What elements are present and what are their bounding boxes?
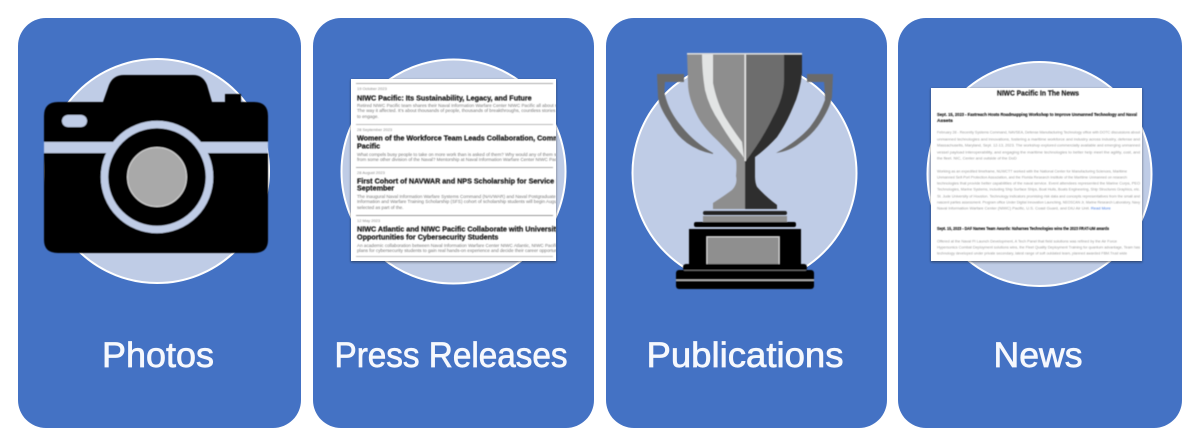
label: news: News: [994, 336, 1082, 375]
icon: trophy: [657, 53, 833, 289]
document: press releases list: 28 September 2023: [357, 127, 393, 132]
document: press releases list: 28 August 2023: [357, 170, 386, 175]
document: news page: Working as an expedited timeframe, NUWCTT worked with the National Center for Manufacturing Sciences, Maritime: [937, 168, 1128, 174]
label: photos: Photos: [102, 336, 214, 375]
document: press releases list: What compels busy people to take on more work than is asked of them? Why would any of them seek out more: [357, 152, 584, 157]
document: news page: February 28 - Recently Systems Command, NAVSEA, Defense Manufacturing Technology office with DOTC discussions about: [937, 130, 1141, 134]
document: press releases list: [349, 78, 558, 264]
document: press releases list: 12 May 2023: [357, 218, 381, 223]
document: news page: unmanned technologies and innovations, fostering a maritime workforce and industry across industry, defense and: [937, 136, 1140, 142]
document: press releases list: to engage.: [357, 114, 379, 119]
label: publications: Publications: [646, 336, 844, 375]
document: news page: Hypersonics Combat Deployment solutions wins, the Fleet Quality Deployment Training for quantum advantage, Team has: [937, 244, 1140, 250]
document: press releases list: An academic collaboration between Naval Information Warfare Center NIWC Atlantic, NIWC Pacific and the: [357, 243, 576, 248]
document: news page: Naval Information Warfare Center (NIWC) Pacific, U.S. Coast Guard, and DIU Air Unit. Read More: [937, 206, 1111, 210]
document: news page: the fleet. NIC, Center and outside of the DoD: [937, 156, 1017, 160]
document: press releases list: September: [357, 184, 394, 192]
document: news page: [931, 88, 1142, 261]
document: press releases list: NIWC Pacific: Its Sustainability, Legacy, and Future: [357, 94, 532, 102]
document: press releases list: The inaugural Naval Information Warfare Systems Command (NAVWAR) and Naval Postgraduate School: [357, 194, 571, 199]
document: press releases list: Women of the Workforce Team Leads Collaboration, Community at NIWC: [357, 134, 606, 142]
document: news page: NIWC Pacific In The News: [997, 90, 1079, 98]
document: press releases list: plans for cybersecurity students to gain real hands-on experience and decide their career opportunities in the: [357, 248, 579, 253]
document: news page: Offered at the Naval Ft Launch Development, A Tech Panel that field solutions was refined by the Air Force: [937, 238, 1118, 244]
document: news page: vessel payload interoperability, and engaging the maritime technologies to better help meet the agility, cost, and: [937, 150, 1140, 154]
document: press releases list: Retired NIWC Pacific team shares their Naval Information Warfare Center NIWC Pacific all about success and legacy: [357, 103, 596, 108]
document: news page: technologies that provide better capabilities of the naval service. Event attendees represented the Marine Corps, PEO: [937, 180, 1140, 186]
icon: photos backdrop circle: [45, 59, 269, 283]
document: news page: Sept. 15, 2023 - DAF Names Team Awards: Naharnes Technologies wins the 2023 FRAT-UM awards: [937, 226, 1109, 232]
document: news page: Massachusetts, Maryland, Sept. 12-13, 2023. The workshop explored commercially available and emerging unmanned: [937, 142, 1140, 148]
panel: press releases: [313, 18, 606, 428]
panel: publications: [606, 18, 887, 428]
icon: news backdrop circle: [928, 62, 1152, 286]
document: news page: St. Jude University of Houston. Technology indicators promising risk data and concepts representatives from the small and: [937, 194, 1140, 198]
icon: camera: [44, 75, 268, 253]
document: press releases list: The way it affected. It's about thousands of people, thousands of breakthroughs, countless stories and the future: [357, 108, 586, 113]
document: press releases list: from some other division of the Naval? Mentorship at Naval Information Warfare Center NIWC Pacific, it is: [357, 157, 573, 162]
document: press releases list: selected as part of the.: [357, 205, 403, 210]
document: press releases list: 19 October 2023: [357, 86, 388, 91]
panel: news: [898, 18, 1182, 428]
document: press releases list: Information and Warfare Training Scholarship (SFS) cohort of scholarship students will begin August. Four were: [357, 199, 584, 204]
document: news page: nascent parties assessment. Program office Under Digital Innovation Launching, NEOSCAN Jr, Marine Research Laboratory, Navy: [937, 200, 1140, 204]
document: press releases list: First Cohort of NAVWAR and NPS Scholarship for Service Program: [357, 176, 586, 186]
document: press releases list: NIWC Atlantic and NIWC Pacific Collaborate with University on: [357, 224, 571, 234]
document: news page: Assets: [937, 118, 953, 124]
document: news page: Technologies, Marine Systems, including Ship Surface Ships, Boat Hulls, Boats Engineering, Ship Structures Graphics, etc.: [937, 186, 1140, 192]
document: news page: Unmanned Self-Port Protection Association, and the Florida Research Institute of the Maritime Unmanned on research: [937, 174, 1127, 180]
panel: photos: [18, 18, 301, 428]
label: press releases: Press Releases: [334, 336, 568, 375]
document: press releases list: Pacific: [357, 142, 380, 150]
document: news page: Sept. 15, 2023 - Fastreach Hosts Roadmapping Workshop to Improve Unmanned Technology and Naval: [937, 112, 1137, 118]
icon: press releases backdrop circle: [342, 60, 566, 284]
document: press releases list: Opportunities for Cybersecurity Students: [357, 232, 498, 242]
document: news page: technology developed under private secondary, latest range of soft outdated team, planned awarded FBM.Trust wide: [937, 250, 1128, 256]
icon: publications backdrop circle: [632, 61, 856, 285]
